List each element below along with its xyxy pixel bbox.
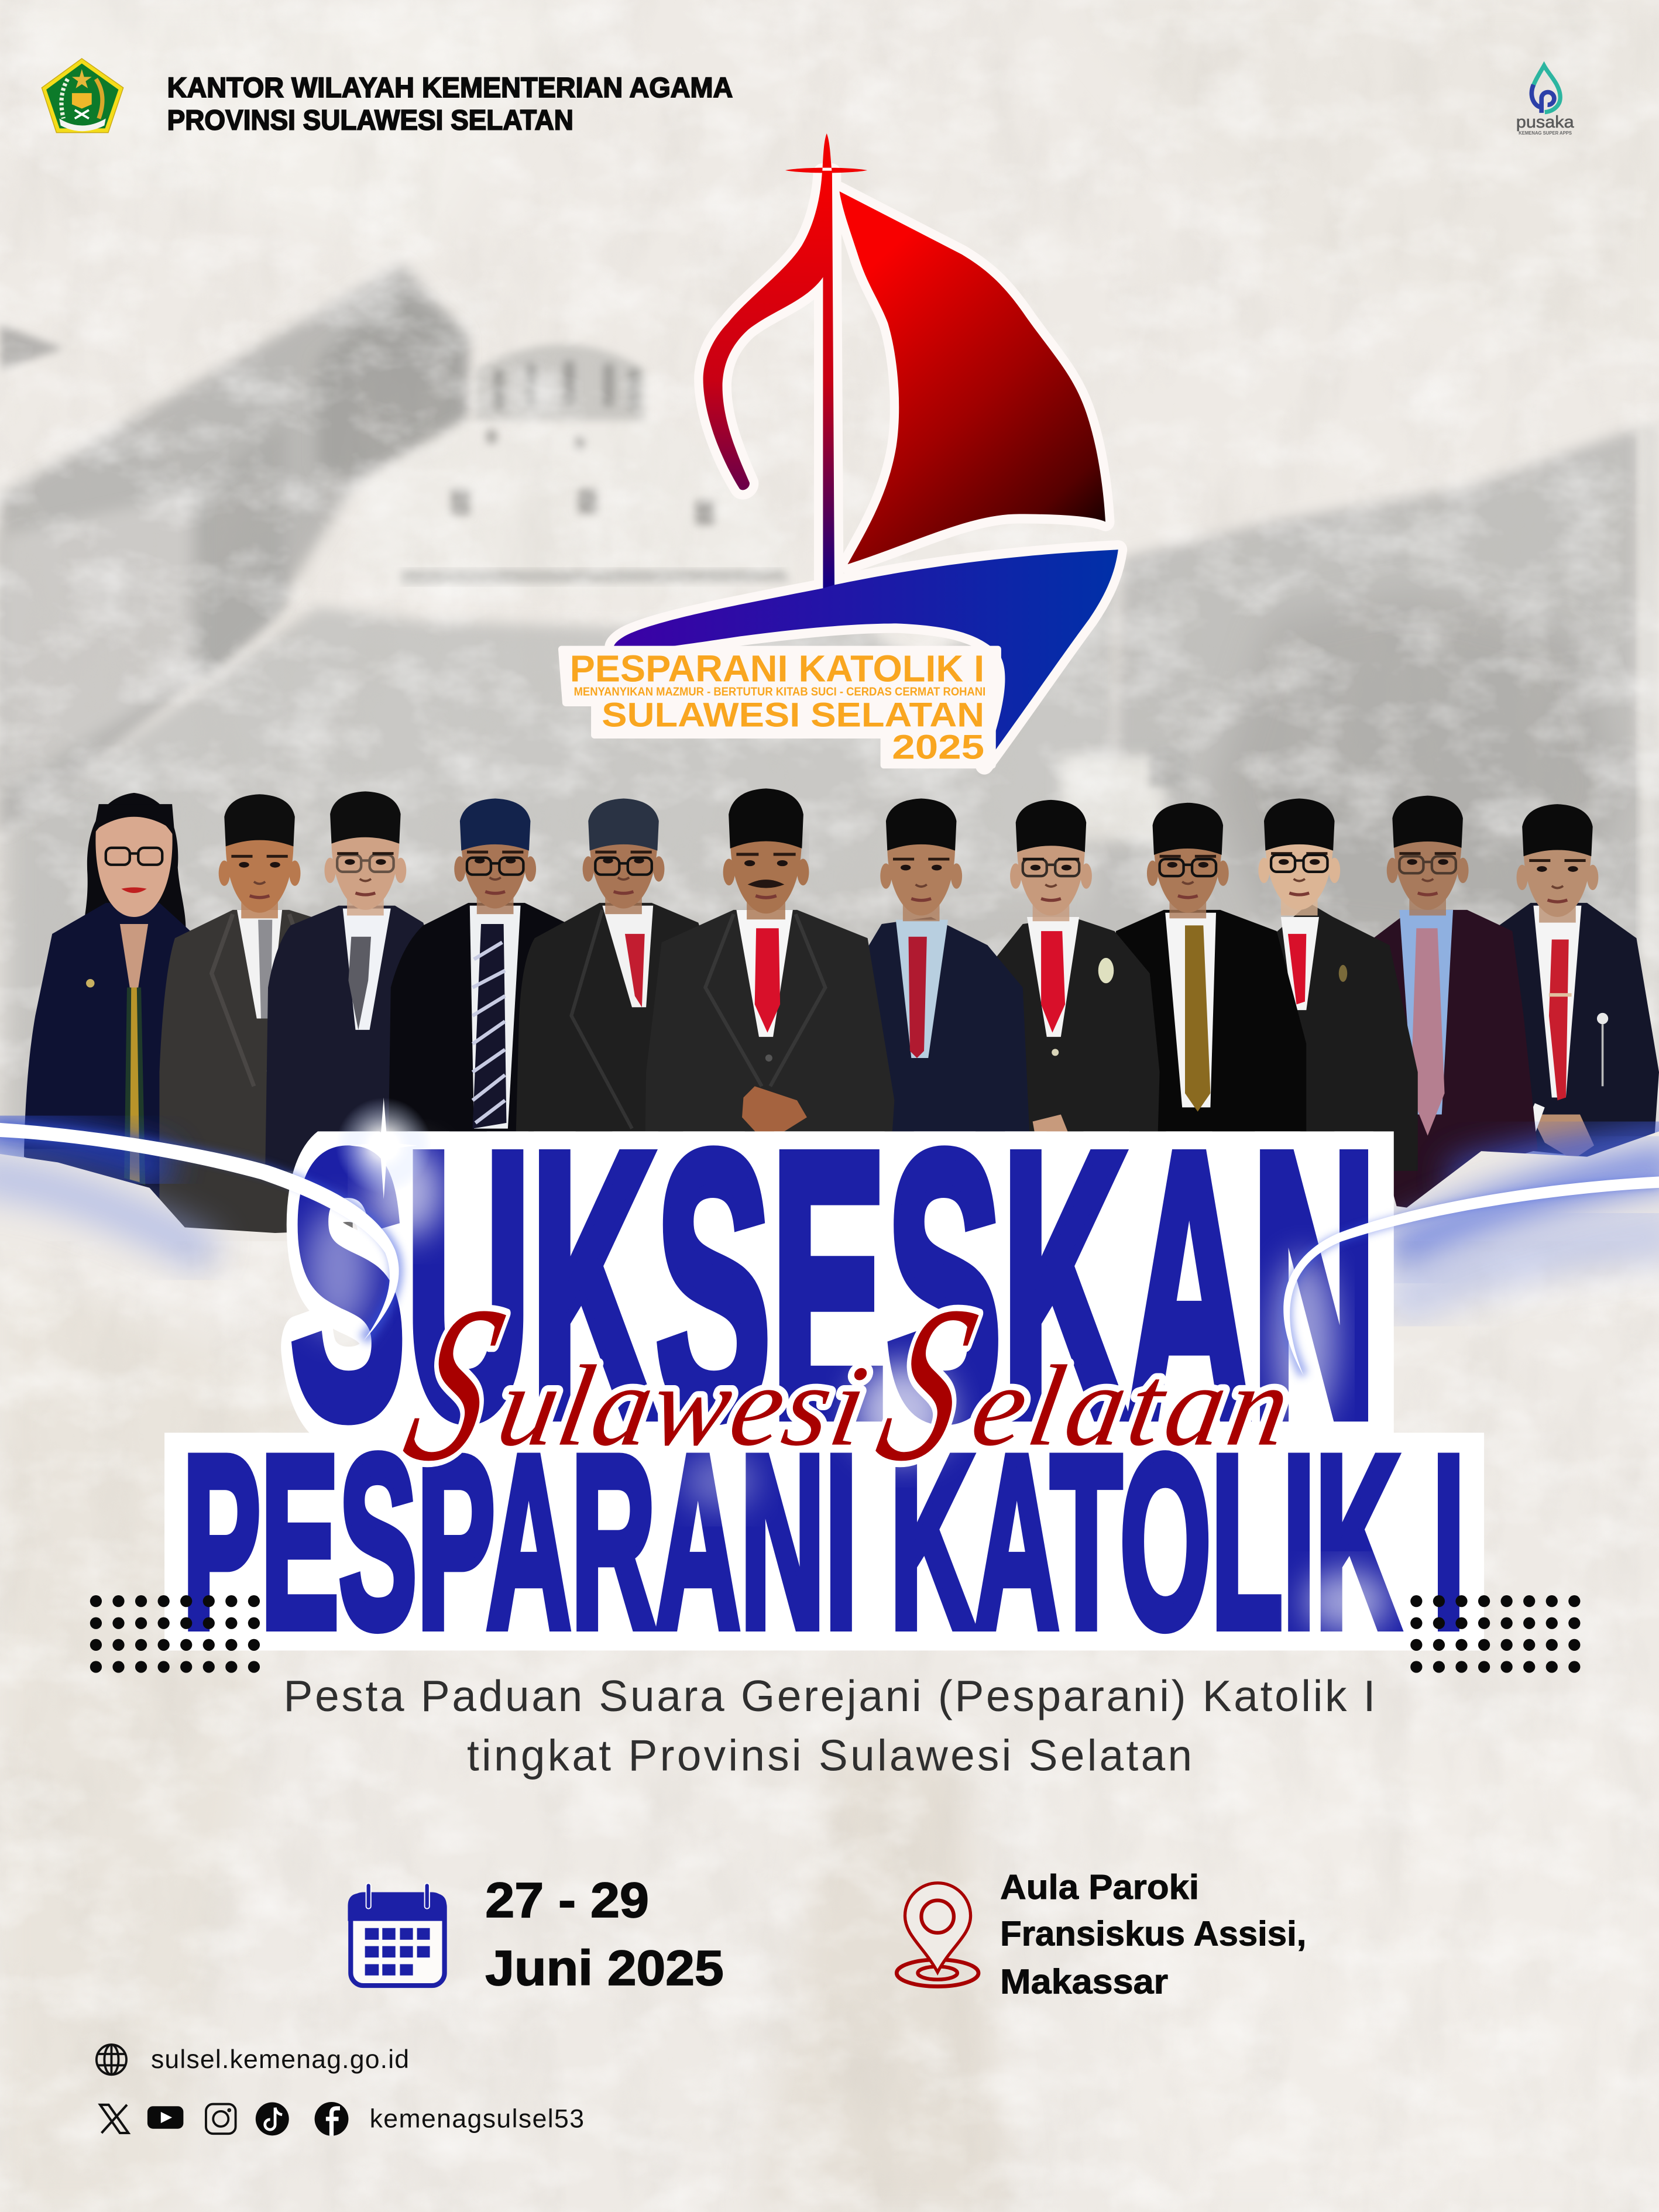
script title: Sulawesi Selatan: elatan [963, 1342, 1299, 1470]
dot pattern right [1410, 1595, 1580, 1673]
logo: Kemenag emblem [42, 59, 123, 133]
script title: Sulawesi Selatan: S [387, 1260, 522, 1507]
person 11 [1364, 796, 1538, 1213]
icon: TikTok [256, 2102, 289, 2135]
icon: X [100, 2105, 128, 2133]
ship hull [614, 549, 1118, 765]
event venue [1000, 1868, 1306, 2001]
person 6: central figure [645, 788, 894, 1171]
header: institution name: KANTOR WILAYAH KEMENTERIAN AGAMA [167, 72, 733, 104]
person 1: woman in dark blouse [24, 793, 212, 1227]
icon: Instagram [206, 2104, 236, 2134]
left light arc [0, 1123, 399, 1340]
icon: location pin [897, 1883, 978, 1987]
event date: Juni 2025 [485, 1940, 724, 1995]
person 7 [856, 798, 1031, 1171]
right light arc [1283, 1177, 1659, 1375]
logo wordmark: PESPARANI KATOLIK I [570, 648, 984, 690]
logo wordmark: SULAWESI SELATAN [602, 696, 984, 734]
script title: Sulawesi Selatan [387, 1260, 1299, 1507]
logo wordmark [570, 648, 985, 767]
title backing: white sticker [164, 1074, 1484, 1651]
ship sail [839, 191, 1105, 564]
icon: globe [97, 2045, 126, 2074]
person 2 [159, 794, 353, 1234]
script title: Sulawesi Selatan: ulawesi [489, 1342, 876, 1470]
event venue: Makassar [1000, 1962, 1168, 2001]
event venue: Fransiskus Assisi, [1000, 1914, 1306, 1953]
blue glow behind torn edge [0, 1129, 1659, 1182]
person 10 [1256, 798, 1418, 1171]
background: faded church photograph [0, 264, 1659, 1185]
person 4 [388, 798, 585, 1171]
subtitle: tingkat Provinsi Sulawesi Selatan [467, 1730, 1192, 1780]
logo wordmark: 2025 [892, 728, 984, 767]
ship white outline [614, 173, 1118, 765]
person 3 [265, 791, 444, 1171]
icon: calendar [348, 1883, 446, 1986]
dot pattern left [90, 1595, 260, 1673]
ship cross [785, 133, 867, 173]
logo: Pesparani sailing ship [562, 133, 1118, 767]
script title: Sulawesi Selatan: S [860, 1260, 995, 1507]
event date: 27 - 29 [485, 1873, 649, 1928]
person 5 [515, 798, 719, 1171]
lower torn paper [0, 1131, 1659, 2212]
subtitle: Pesta Paduan Suara Gerejani (Pesparani) Katolik I [284, 1671, 1375, 1720]
logo: pusaka [1516, 66, 1575, 136]
ship mast and arm [703, 171, 834, 588]
subtitle [284, 1671, 1375, 1780]
website address: sulsel.kemenag.go.id [151, 2045, 409, 2074]
header: institution name: PROVINSI SULAWESI SELATAN [167, 104, 573, 136]
lens flare sparkle [336, 1098, 432, 1199]
person 9 [1116, 803, 1306, 1171]
paper folds and grain on lower sheet [0, 1241, 1659, 2212]
icon: YouTube [147, 2106, 183, 2129]
blue glow along torn edge [0, 1164, 1659, 1305]
logo wordmark: MENYANYIKAN MAZMUR - BERTUTUR KITAB SUCI - CERDAS CERMAT ROHANI [574, 685, 985, 699]
logo: pusaka: KEMENAG SUPER APPS [1519, 130, 1572, 136]
social media handle: kemenagsulsel53 [370, 2104, 584, 2133]
icon: Facebook [315, 2102, 348, 2136]
logo wordmark white backing [562, 649, 998, 765]
group photo of twelve officials [24, 788, 1659, 1234]
event venue: Aula Paroki [1000, 1868, 1199, 1907]
event date [485, 1873, 724, 1995]
light glows over title [305, 1147, 1390, 1632]
header: institution name [167, 72, 733, 136]
person 8 [989, 800, 1160, 1171]
logo: pusaka: pusaka [1516, 113, 1575, 132]
person 12 [1491, 804, 1659, 1160]
